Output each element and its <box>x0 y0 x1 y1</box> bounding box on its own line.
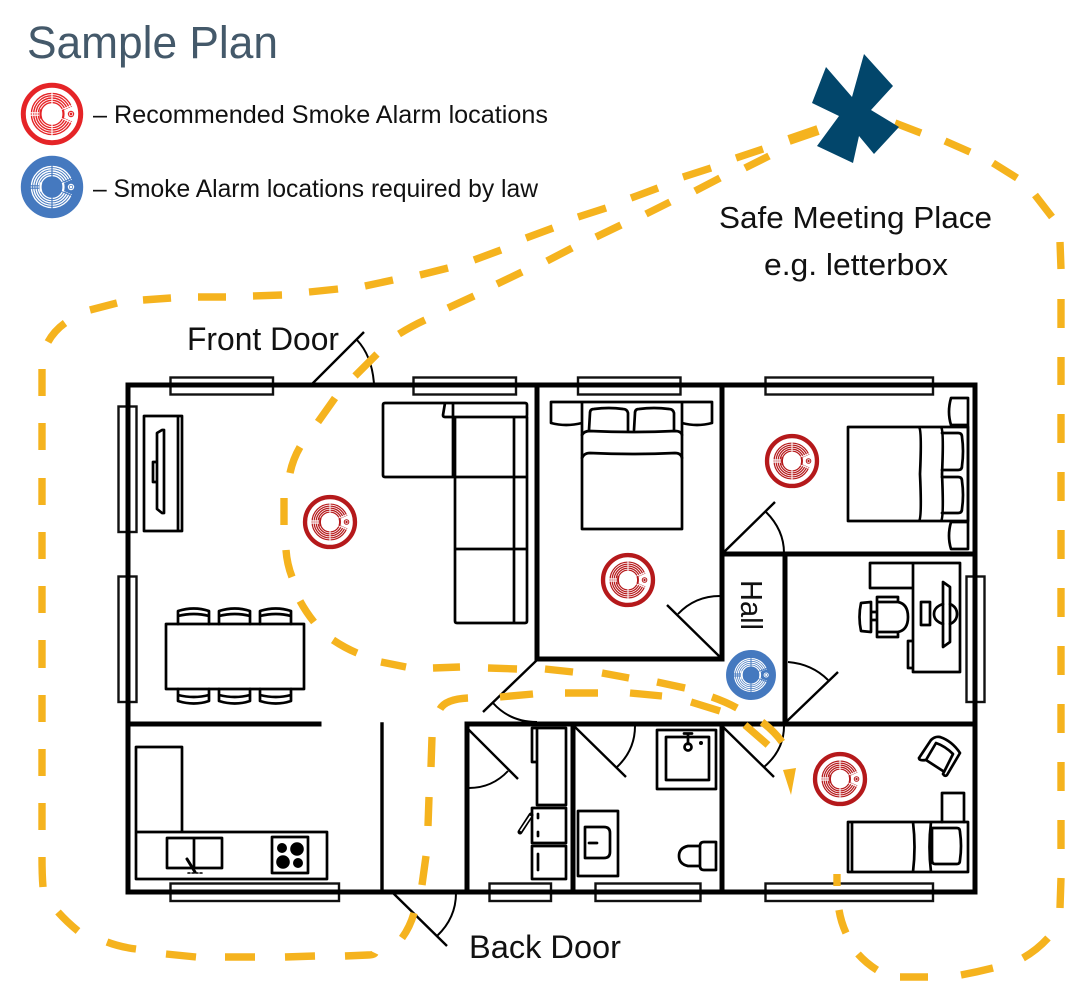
kitchen <box>136 747 327 879</box>
bathroom <box>578 730 716 876</box>
smoke alarm: living room <box>305 497 355 547</box>
doors <box>312 332 838 946</box>
bedroom 2: bed <box>848 398 968 549</box>
legend <box>23 85 548 216</box>
route: outer loop from meeting place around left and back door to bedroom 3 <box>42 149 768 957</box>
label: hall: Hall <box>734 580 769 630</box>
label: back door: Back Door <box>469 929 621 965</box>
tv unit <box>144 416 182 531</box>
walls <box>128 385 975 892</box>
route: front door to bedroom 3 and meeting place <box>284 156 782 742</box>
living room furniture <box>144 403 527 704</box>
smoke alarm: hall (required) <box>728 652 774 698</box>
arrowhead <box>783 768 796 795</box>
icon: safe meeting place marker <box>812 54 899 163</box>
sofa <box>383 403 527 623</box>
label: letterbox example: e.g. letterbox <box>764 247 949 282</box>
armchair <box>919 737 960 776</box>
laundry <box>520 728 566 879</box>
thick dash at meeting place <box>789 130 818 140</box>
label: front door: Front Door <box>187 321 339 357</box>
icon: recommended smoke alarm <box>23 85 81 143</box>
bedroom 3: single bed <box>848 737 968 872</box>
floor plan <box>118 332 984 946</box>
smoke alarm: bedroom 3 <box>815 754 865 804</box>
windows <box>118 378 984 901</box>
label: safe meeting place: Safe Meeting Place <box>719 200 992 235</box>
title: Sample Plan <box>27 17 278 68</box>
icon: required smoke alarm <box>23 158 81 216</box>
legend text: required: – Smoke Alarm locations required by law <box>93 175 539 203</box>
legend text: recommended: – Recommended Smoke Alarm locations <box>93 101 548 129</box>
office <box>860 563 960 672</box>
office chair <box>860 597 908 637</box>
smoke alarm: bedroom 1 <box>603 555 653 605</box>
bedroom 1: main bed <box>551 402 712 529</box>
route: meeting place right side around to bedroom 3 <box>837 123 1061 977</box>
smoke alarm: bedroom 2 <box>767 436 817 486</box>
dining table <box>166 608 304 704</box>
